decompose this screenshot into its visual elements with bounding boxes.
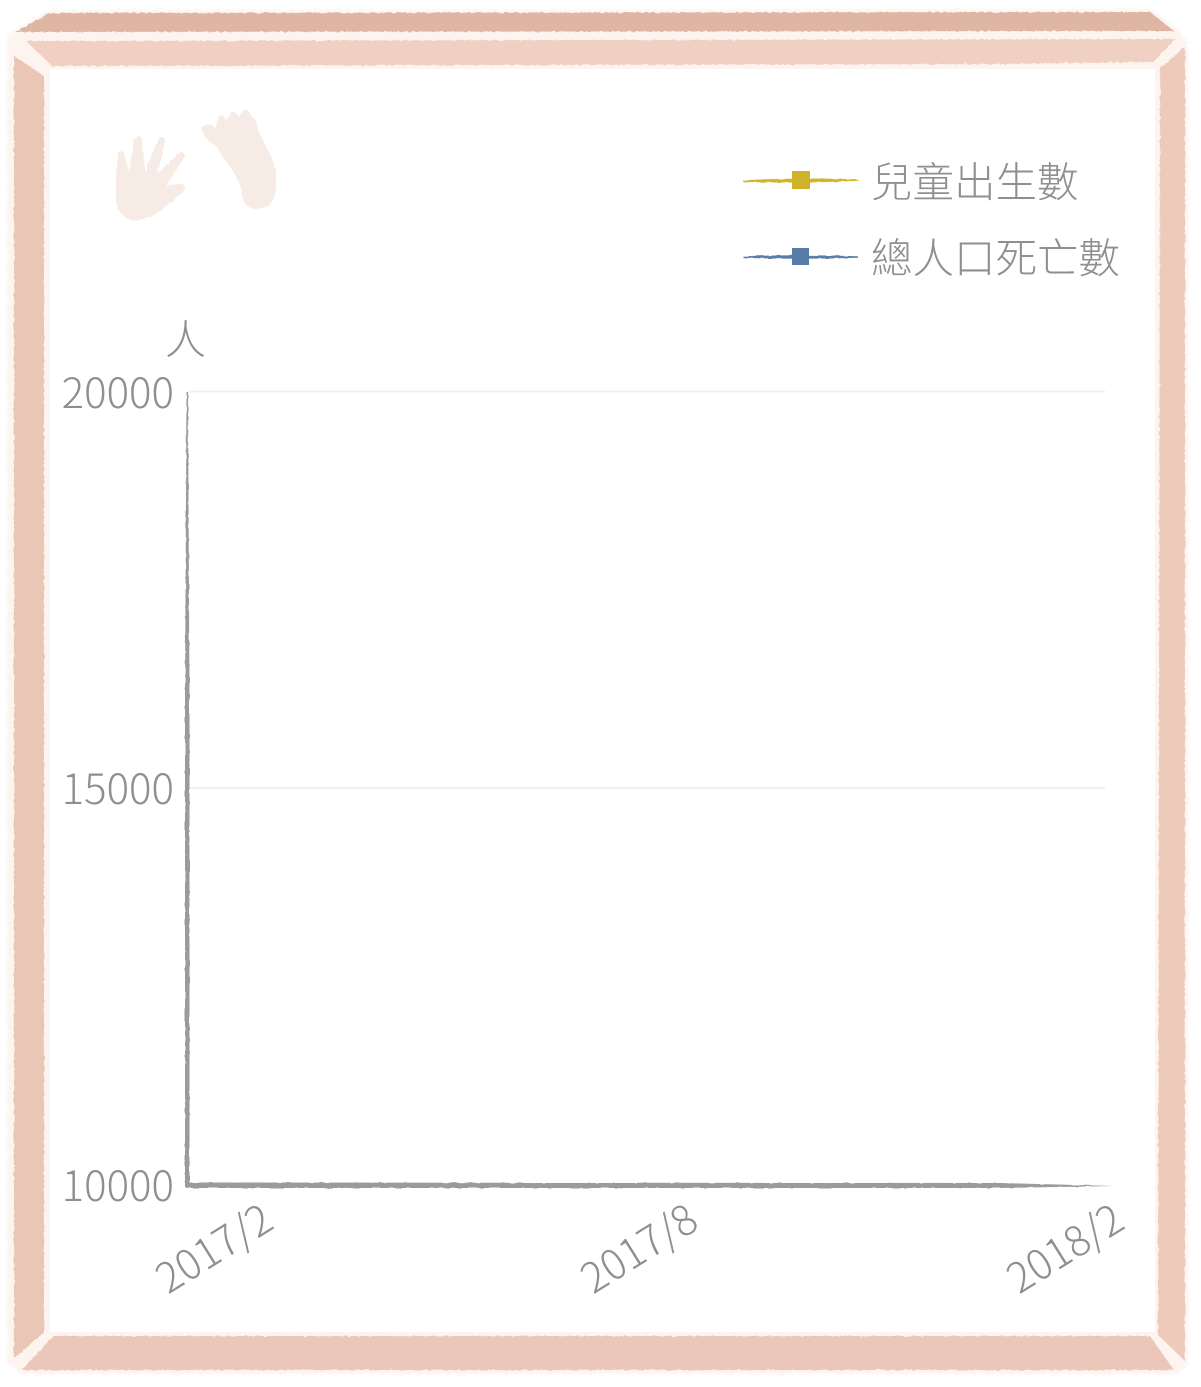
icon: baby handprint bbox=[116, 135, 185, 220]
gridline 15000 bbox=[189, 787, 1105, 789]
x-axis label 2018/2: 2018/2 bbox=[994, 1187, 1133, 1305]
frame: right band bbox=[1158, 47, 1185, 1361]
frame: top inner band bbox=[26, 39, 1176, 66]
legend item: children born bbox=[743, 149, 1079, 209]
frame: bottom band bbox=[22, 1336, 1174, 1370]
x-axis label 2017/8: 2017/8 bbox=[568, 1187, 707, 1305]
y-axis label 10000: 10000 bbox=[62, 1153, 174, 1214]
y-axis label 20000: 20000 bbox=[62, 360, 174, 421]
x axis bbox=[186, 1182, 1115, 1188]
frame: top outer band bbox=[15, 12, 1174, 32]
x-axis label 2017/2: 2017/2 bbox=[143, 1187, 282, 1305]
y-axis label 15000: 15000 bbox=[62, 756, 174, 817]
icon: baby footprint bbox=[202, 110, 277, 209]
y-axis unit: 人 bbox=[165, 306, 206, 366]
gridline 20000 bbox=[189, 390, 1105, 392]
frame: left band bbox=[14, 56, 44, 1358]
legend item: total deaths bbox=[743, 225, 1120, 285]
legend item: total deaths: 總人口死亡數 bbox=[871, 225, 1120, 285]
legend item: children born: 兒童出生數 bbox=[871, 149, 1079, 209]
y axis bbox=[185, 392, 190, 1187]
legend bbox=[743, 149, 1120, 285]
line chart axes bbox=[62, 306, 1133, 1305]
